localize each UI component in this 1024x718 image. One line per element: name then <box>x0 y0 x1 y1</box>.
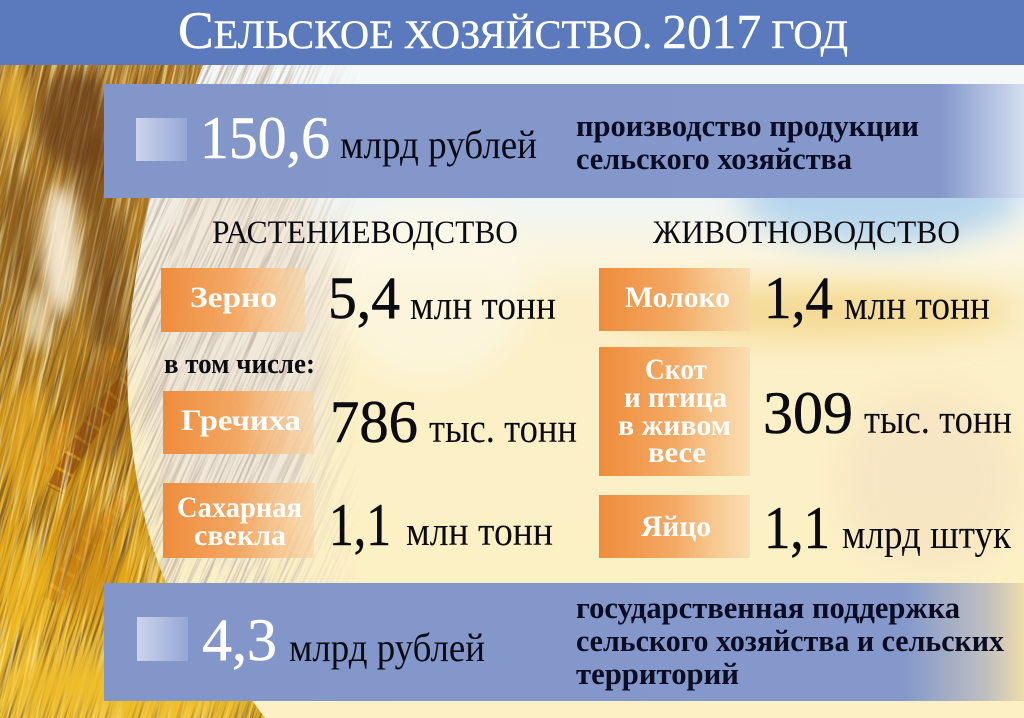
heading: crop farming: РАСТЕНИЕВОДСТВО <box>212 215 518 251</box>
description: state support: государственная поддержка <box>576 590 960 625</box>
row: eggs: млрд штук <box>842 511 1011 557</box>
value: 4,3 billion rubles: млрд рублей <box>289 625 485 670</box>
background: sky and field inside the pale disc <box>127 65 1024 718</box>
icon: square bullet <box>136 118 187 161</box>
value: 4,3 billion rubles <box>202 607 485 673</box>
row: eggs: Яйцо <box>641 510 711 543</box>
row: livestock and poultry: 309 <box>763 380 853 446</box>
row: eggs: 1,1 <box>764 495 830 561</box>
text: including: в том числе: <box>164 349 315 380</box>
grain rows <box>55 372 138 490</box>
row: milk: 1,4 <box>764 265 833 331</box>
description: production: производство продукции <box>576 108 919 143</box>
header bar <box>0 0 1024 65</box>
row: eggs <box>599 495 1011 561</box>
row: sugar beet: 1,1 <box>329 492 391 558</box>
row: buckwheat: 786 <box>330 389 418 455</box>
value: 150,6 billion rubles: 150,6 <box>200 105 330 171</box>
row: livestock and poultry: в живом <box>618 409 731 442</box>
value: 4,3 billion rubles: 4,3 <box>202 607 277 673</box>
value: 150,6 billion rubles: млрд рублей <box>340 122 537 167</box>
description: production <box>576 108 919 176</box>
row: livestock and poultry: Скот <box>645 353 707 386</box>
row: grain: 5,4 <box>328 265 400 331</box>
description: state support <box>576 590 1004 691</box>
row: sugar beet <box>163 483 553 558</box>
description: state support: территорий <box>576 656 739 691</box>
panel: state support <box>104 583 1024 701</box>
row: milk <box>599 265 990 331</box>
description: state support: сельского хозяйства и сельских <box>576 623 1004 658</box>
row: sugar beet: свекла <box>194 519 286 552</box>
row: buckwheat <box>163 389 577 455</box>
row: livestock and poultry: весе <box>648 436 706 469</box>
row: grain: Зерно <box>190 281 277 314</box>
description: production: сельского хозяйства <box>576 141 852 176</box>
value: 150,6 billion rubles <box>200 105 537 171</box>
row: livestock and poultry: и птица <box>624 381 727 414</box>
icon: square bullet <box>137 617 188 661</box>
row: livestock and poultry <box>599 347 1012 476</box>
row: sugar beet: Сахарная <box>177 491 302 524</box>
row: milk: Молоко <box>625 281 730 314</box>
panel: total agricultural production <box>104 84 1024 198</box>
heading: livestock farming: ЖИВОТНОВОДСТВО <box>653 215 960 251</box>
row: milk: млн тонн <box>844 282 990 328</box>
title: СЕЛЬСКОЕ ХОЗЯЙСТВО. 2017 ГОД <box>178 2 848 60</box>
background: wheat ears on the left <box>0 60 300 718</box>
row: buckwheat: тыс. тонн <box>429 405 577 451</box>
row: buckwheat: Гречиха <box>181 404 301 437</box>
row: grain <box>161 265 556 332</box>
row: sugar beet: млн тонн <box>406 508 553 554</box>
row: grain: млн тонн <box>410 282 556 328</box>
